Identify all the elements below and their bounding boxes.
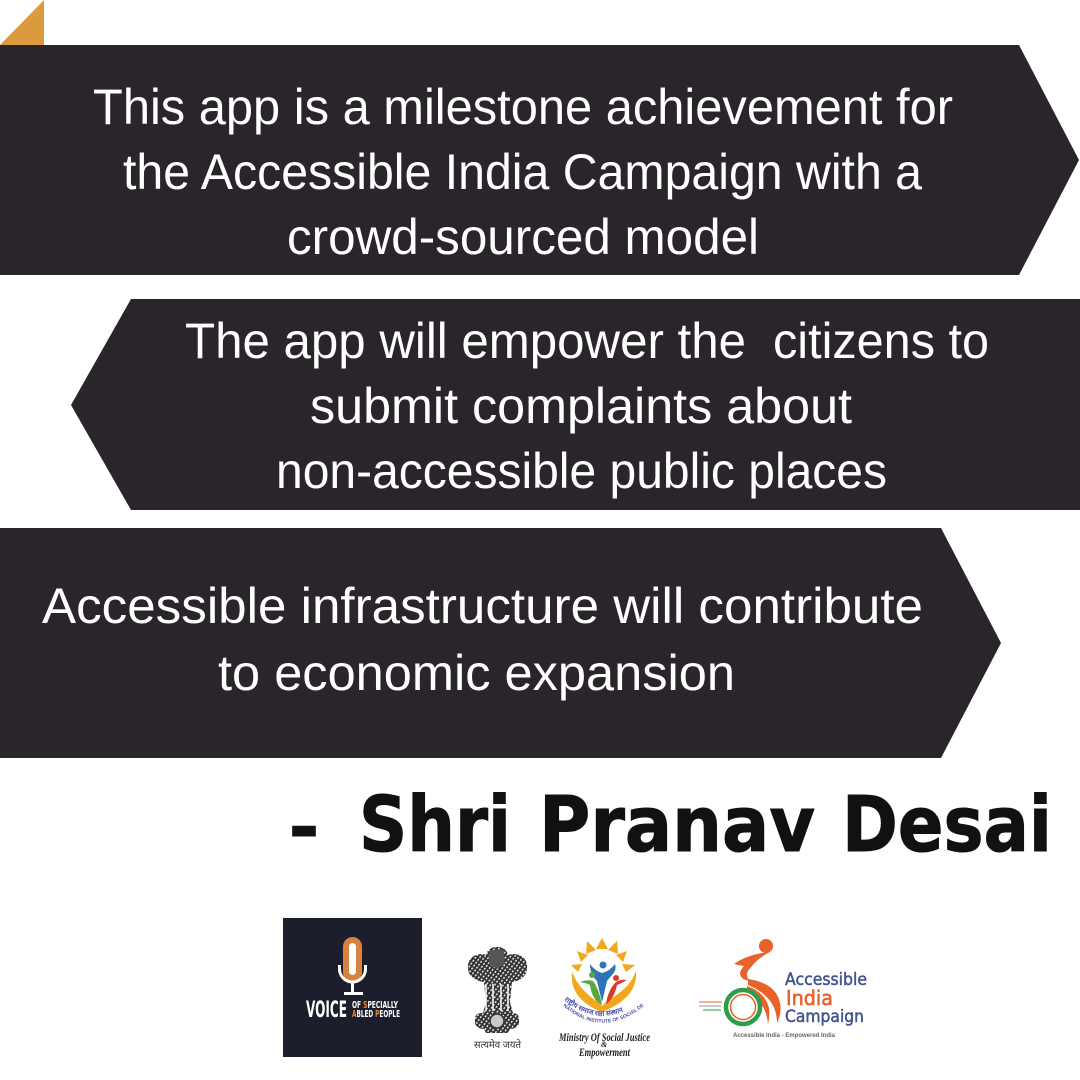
campaign wordmark (785, 970, 867, 1027)
ministry caption: & (601, 1040, 608, 1049)
logo wordmark: ABLED PEOPLE (352, 1009, 400, 1020)
logo: state emblem of India (468, 947, 527, 1051)
corner fold triangle (0, 0, 44, 45)
panel: milestone arrow (0, 45, 1079, 275)
text: infrastructure statement: to economic expansion (218, 645, 735, 701)
text: empower statement: non-accessible public places (276, 443, 887, 499)
logo wordmark: VOICE (306, 998, 347, 1023)
speaker name: Pranav (539, 781, 815, 870)
text: empower statement: citizens to (773, 313, 989, 369)
icon: microphone (340, 937, 366, 995)
institute arc text: राष्ट्रीय समाज रक्षा संस्थान (565, 996, 623, 1016)
icon: hands (572, 970, 636, 1012)
ministry caption: Empowerment (578, 1045, 630, 1059)
campaign wordmark: Campaign (785, 1007, 864, 1027)
text: milestone statement (93, 79, 953, 265)
text: empower statement: submit complaints about (310, 378, 852, 434)
text: milestone statement: the Accessible India Campaign with a (123, 144, 922, 200)
icon: sun rays (571, 938, 635, 972)
icon: red person (606, 980, 627, 1004)
icon: green person (580, 980, 602, 1005)
text: milestone statement: This app is a milestone achievement for (93, 79, 953, 135)
emblem pedestal (475, 1013, 519, 1033)
campaign tagline: Accessible India - Empowered India (733, 1033, 836, 1039)
text: milestone statement: crowd-sourced model (287, 209, 759, 265)
institute arc text (563, 996, 644, 1023)
logo: accessible india campaign (699, 939, 867, 1039)
logo: voice of specially abled people (283, 918, 422, 1057)
campaign wordmark: Accessible (785, 970, 867, 990)
logo: ministry of social justice (558, 938, 650, 1059)
campaign wordmark: India (786, 986, 833, 1010)
icon: wheelchair figure (699, 939, 781, 1024)
speaker name: - (288, 782, 320, 871)
ministry caption: Ministry Of Social Justice (558, 1030, 650, 1044)
speaker name: Desai (842, 781, 1052, 870)
panel: infrastructure arrow (0, 528, 1001, 758)
text: infrastructure statement: Accessible infrastructure will contribute (42, 578, 923, 634)
ministry caption (558, 1030, 650, 1059)
logo wordmark: OF SPECIALLY (352, 1000, 398, 1011)
speaker name: Shri (359, 781, 511, 870)
text: infrastructure statement (42, 578, 923, 701)
emblem lions (468, 947, 527, 1013)
speaker name (288, 781, 1052, 871)
icon: blue person (590, 964, 616, 1002)
institute arc text: NATIONAL INSTITUTE OF SOCIAL DEFENCE (563, 1003, 644, 1023)
text: empower statement: The app will empower the (185, 313, 746, 369)
text: empower statement (185, 313, 989, 499)
panel: empower citizens arrow (71, 299, 1080, 510)
emblem motto: सत्यमेव जयते (474, 1039, 521, 1051)
